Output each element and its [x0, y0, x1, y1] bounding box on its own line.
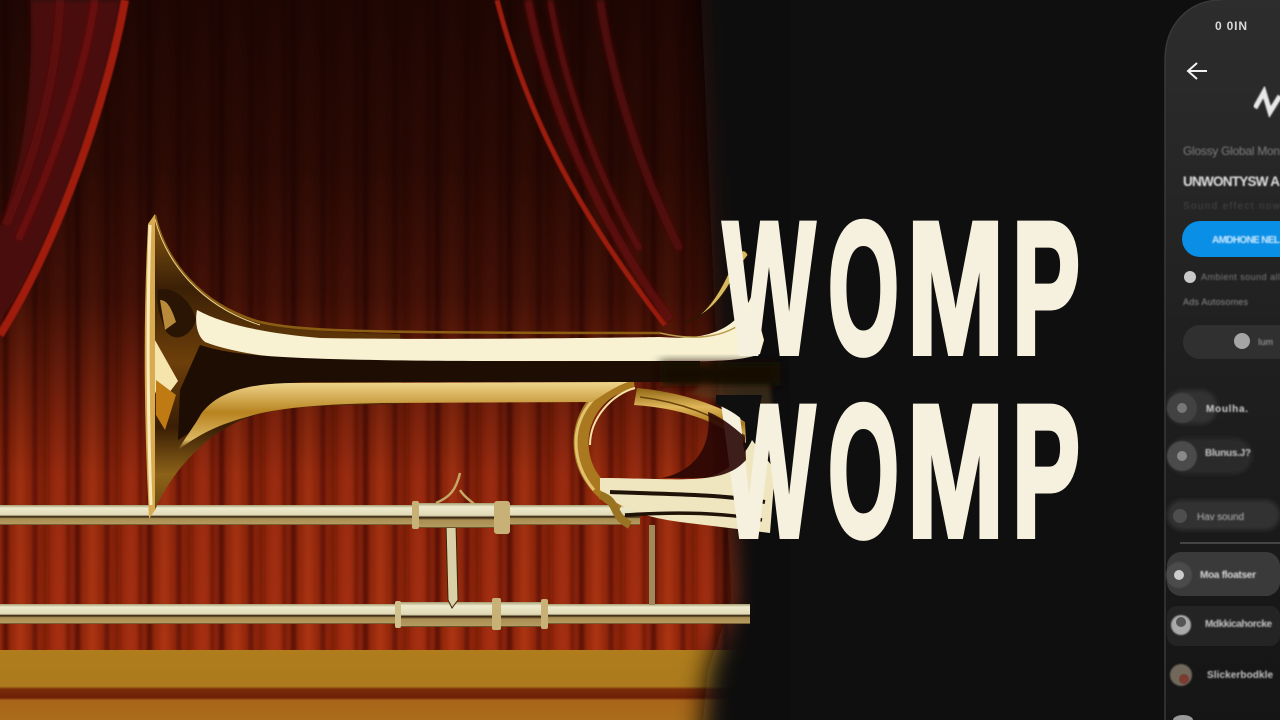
row: info line: [1184, 271, 1280, 283]
list item 4: [1166, 552, 1280, 596]
list item 3: Hav sound: [1197, 512, 1244, 523]
upper slide rod: [0, 473, 640, 534]
bell rim: [145, 214, 155, 519]
text lines: UNWONTYSW A: [1183, 174, 1280, 189]
phone mockup: [1165, 0, 1280, 720]
word: WOMP top: M: [907, 183, 1004, 393]
list item 2: [1167, 438, 1252, 474]
blue button: AMDHONE NEL: [1212, 235, 1280, 246]
word: WOMP top: O: [828, 183, 899, 393]
tuning loop: [576, 379, 775, 533]
text lines: Glossy Global Mon: [1183, 144, 1280, 158]
mask: dark over lower W left arm: [716, 395, 762, 430]
list item 7: [1173, 715, 1193, 720]
pill row: [1183, 325, 1280, 359]
stage floor: [0, 650, 760, 720]
row: info line: Ambient sound all: [1201, 272, 1280, 282]
icon: logo: [1255, 92, 1280, 112]
divider: [1180, 542, 1280, 544]
word: WOMP bottom: W: [723, 366, 815, 576]
word: WOMP bottom: M: [907, 366, 1004, 576]
bell interior highlights: [151, 333, 178, 405]
bright band: [196, 295, 764, 361]
dark tube band: [178, 345, 700, 440]
upper sliver: [685, 251, 748, 322]
list item 3: [1167, 500, 1280, 530]
word: WOMP bottom: O: [828, 366, 899, 576]
word: WOMP bottom: P: [1012, 366, 1080, 576]
lower flow: [600, 440, 775, 533]
lower slide rod: [0, 524, 750, 630]
list item 1: [1167, 390, 1248, 424]
stage background: [0, 0, 749, 720]
word: WOMP top: W: [723, 183, 815, 393]
list item 2: Blunus.J?: [1205, 448, 1251, 459]
list item 1: Moulha.: [1206, 404, 1248, 415]
mask: loop interior shadow: [662, 412, 746, 478]
word: WOMP top: [723, 183, 1080, 393]
fade to black: [682, 0, 790, 720]
bell and main tube: [145, 214, 780, 519]
list item 6: [1170, 664, 1273, 686]
word: WOMP bottom: [723, 366, 1080, 576]
list item 5: Mdkkicahorcke: [1205, 619, 1272, 630]
pill row: Ium: [1258, 337, 1273, 347]
right drape: [497, 0, 680, 325]
text lines: Sound effect now: [1183, 201, 1280, 212]
left drape: [0, 0, 125, 335]
blue button: [1182, 221, 1280, 257]
list item 4: Moa floatser: [1200, 570, 1256, 581]
curtain: [0, 0, 800, 660]
status bar: 0 0IN: [1215, 19, 1247, 33]
text lines: [1183, 144, 1280, 212]
lower gold: [178, 382, 628, 450]
list item 5: [1167, 606, 1280, 646]
label: Ads Autosomes: [1183, 297, 1248, 307]
title: WOMP WOMP: [723, 183, 1080, 576]
tube smudge: [690, 385, 775, 430]
list item 6: Slickerbodkle: [1207, 670, 1273, 681]
word: WOMP top: P: [1012, 183, 1080, 393]
icon: back arrow: [1188, 63, 1207, 79]
